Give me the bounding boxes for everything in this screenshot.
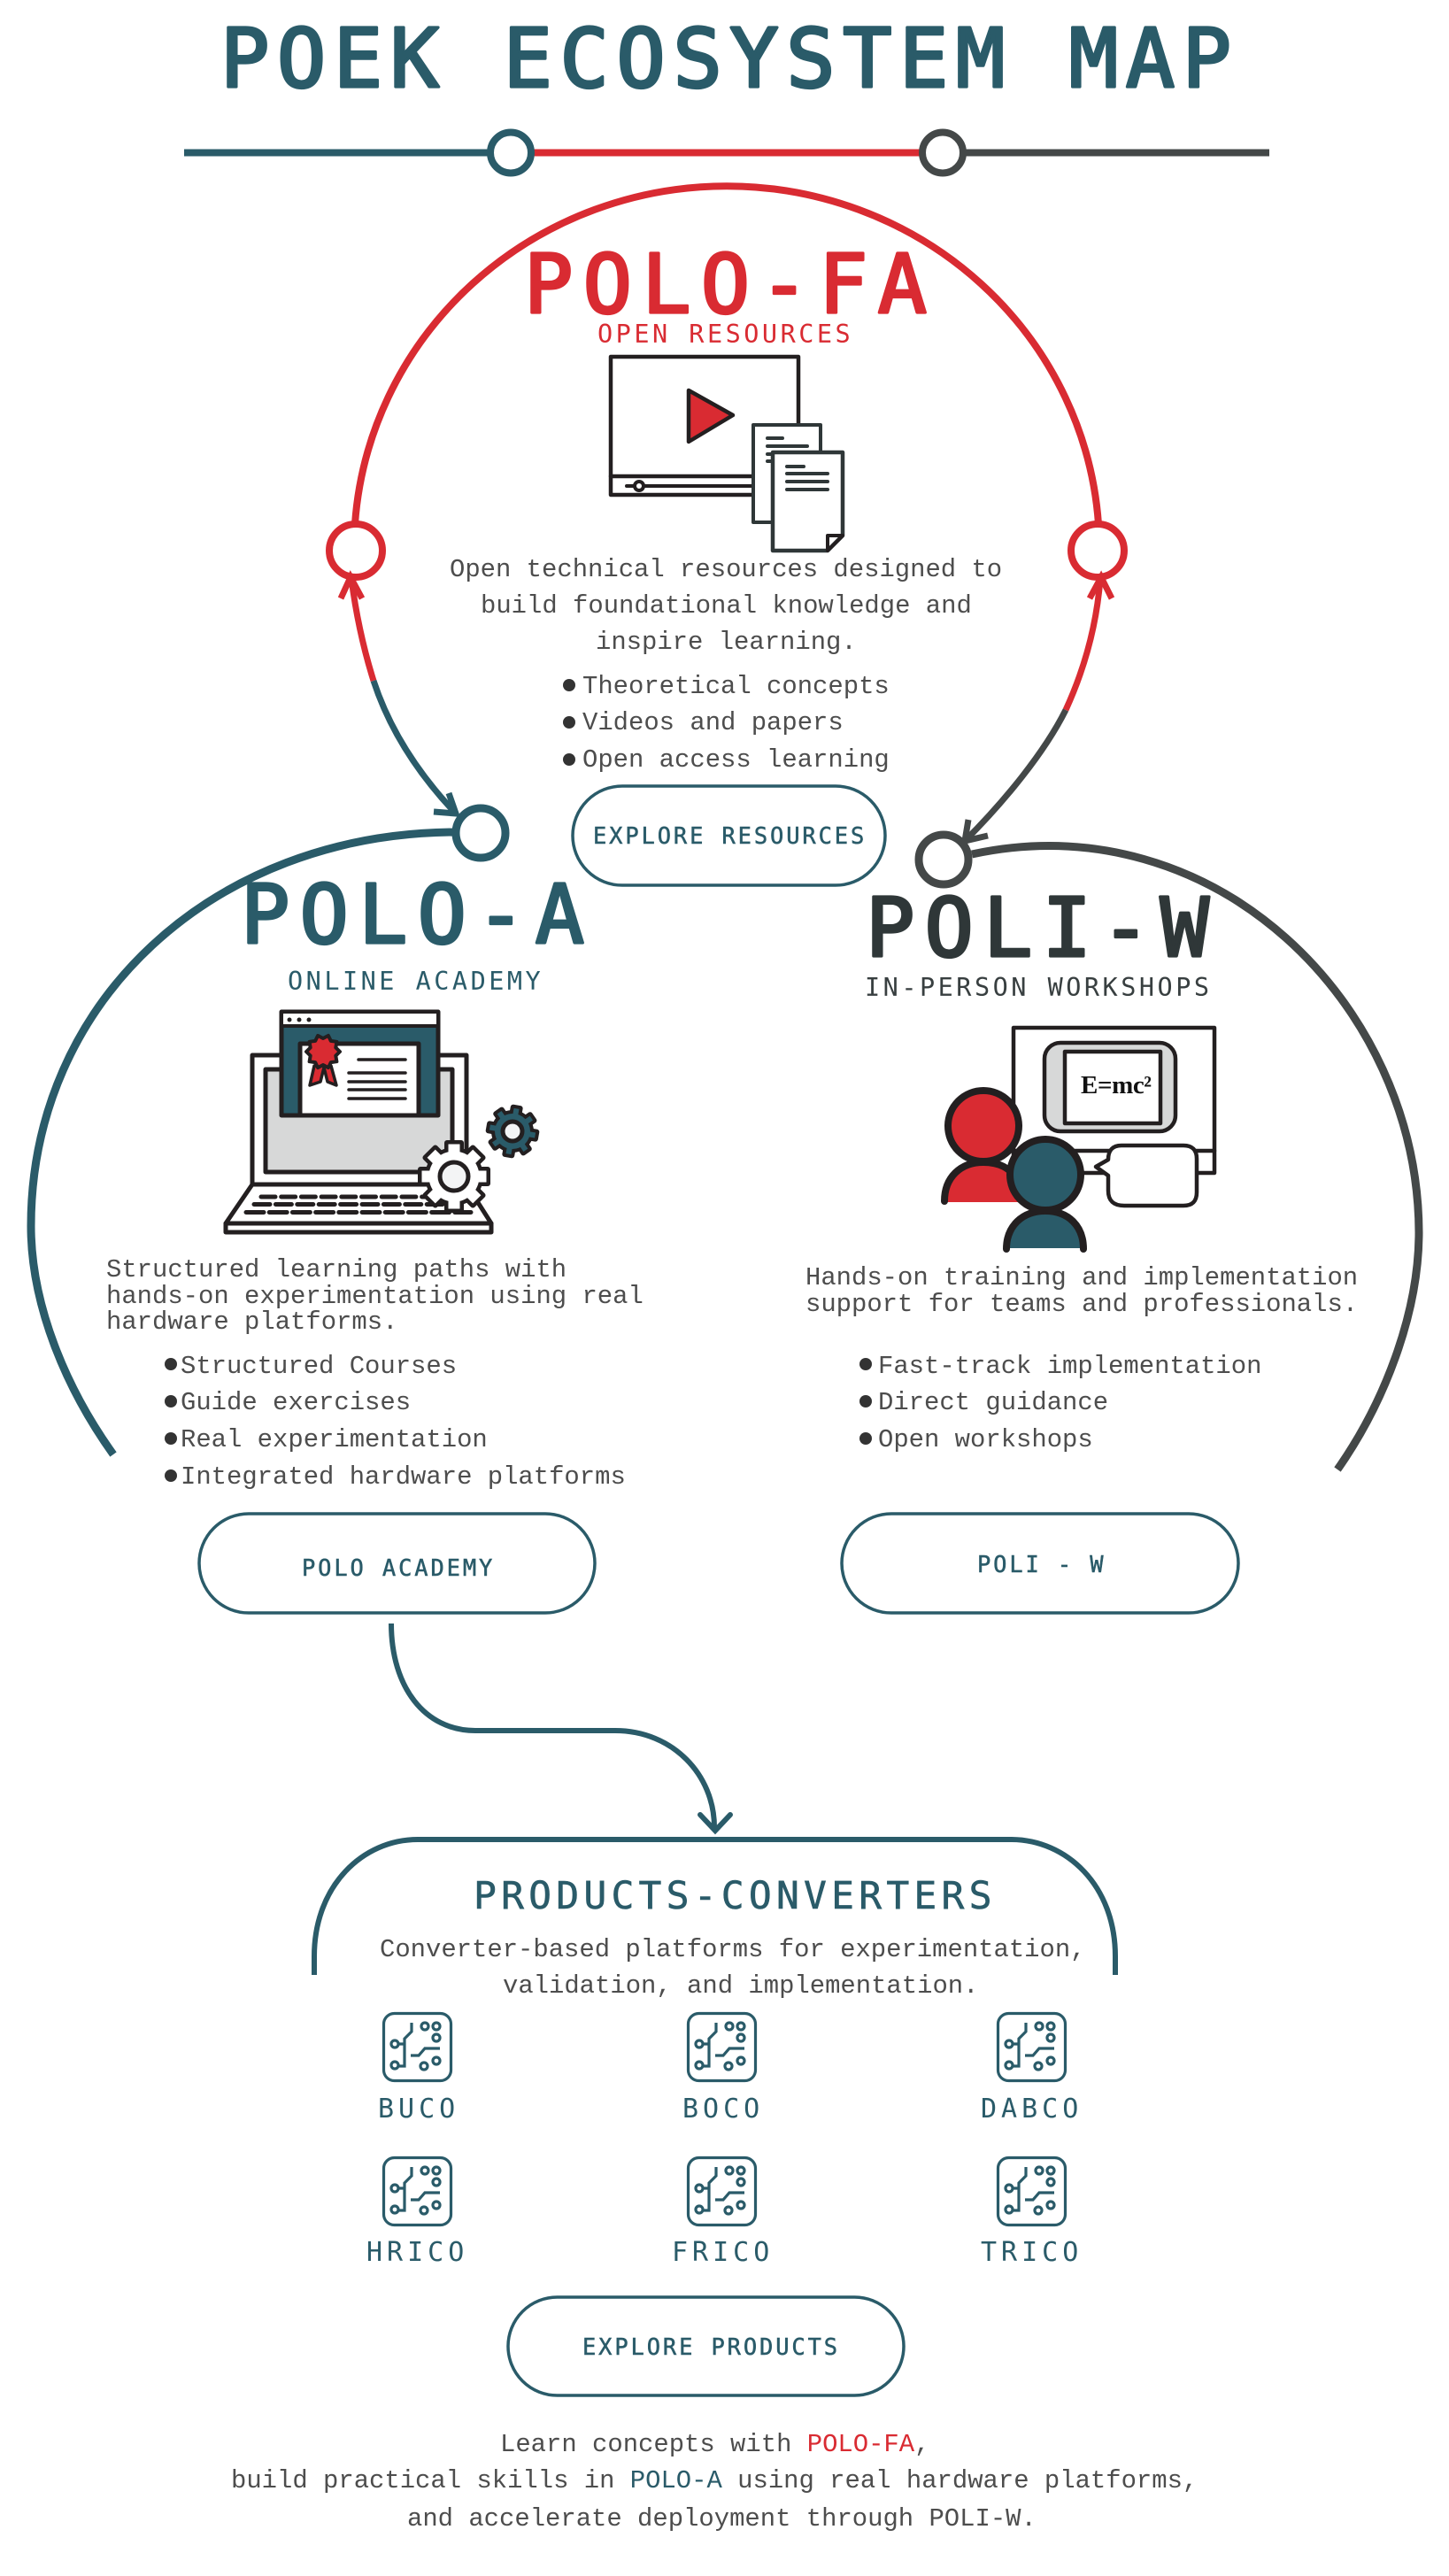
list: POLO-FA bullets: Theoretical concepts (582, 672, 890, 701)
list: POLI-W bullets (859, 1352, 1261, 1454)
text block: POLO-FA description (450, 555, 1002, 657)
text block: POLO-A description: Structured learning paths with (106, 1255, 566, 1284)
icon: white gear (418, 1140, 490, 1213)
button: explore products: EXPLORE PRODUCTS (582, 2333, 840, 2360)
list: POLI-W bullets: Fast-track implementation (878, 1352, 1261, 1381)
list: POLO-FA bullets: Videos and papers (582, 708, 844, 737)
heading: products-converters: PRODUCTS-CONVERTERS (474, 1874, 997, 1918)
text block: POLI-W description: Hands-on training and implementation (805, 1263, 1358, 1292)
list: POLO-FA bullets: Open access learning (582, 745, 890, 775)
list: POLO-A bullets: Real experimentation (181, 1425, 488, 1454)
list: POLI-W bullets: Open workshops (878, 1425, 1093, 1454)
icon: teal gear (485, 1104, 540, 1159)
button: explore resources: EXPLORE RESOURCES (593, 822, 867, 849)
timeline divider with two nodes (184, 133, 1269, 174)
text block: POLO-FA description: Open technical resources designed to (450, 555, 1002, 584)
panel: POLI-W arch (919, 835, 1419, 1469)
text block: POLO-FA description: build foundational knowledge and (481, 591, 972, 621)
arrow: academy to products (391, 1623, 730, 1831)
title: POEK ECOSYSTEM MAP (220, 12, 1231, 106)
text block: POLI-W description (805, 1263, 1358, 1319)
button: POLO academy: POLO ACADEMY (302, 1554, 495, 1581)
heading: POLO-A: POLO-A (241, 868, 584, 962)
list: POLI-W bullets: Direct guidance (878, 1388, 1108, 1417)
button: POLI-W (842, 1514, 1238, 1613)
text block: POLO-A description: hands-on experimentation using real (106, 1282, 644, 1311)
arrow: POLO-A to POLO-FA link (341, 577, 456, 814)
button: explore products (508, 2297, 904, 2395)
product: TRICO (981, 2158, 1083, 2268)
product: FRICO: FRICO (672, 2237, 774, 2268)
text block: POLI-W description: support for teams and professionals. (805, 1290, 1358, 1319)
subheading: in-person workshops: IN-PERSON WORKSHOPS (865, 973, 1213, 1002)
text block: products description: Converter-based platforms for experimentation, (380, 1935, 1086, 1964)
product: BOCO (682, 2013, 764, 2125)
product: TRICO: TRICO (981, 2237, 1083, 2268)
heading: POLO-FA: POLO-FA (524, 237, 927, 332)
panel: POLO-FA arch (329, 186, 1124, 577)
product: BUCO (378, 2013, 459, 2125)
list: POLO-A bullets: Integrated hardware platforms (181, 1462, 626, 1492)
button: POLO academy (199, 1514, 595, 1613)
text block: POLO-A description (106, 1255, 644, 1337)
closing text block (231, 2430, 1198, 2534)
text block: products description (380, 1935, 1086, 2001)
text block: products description: validation, and implementation. (503, 1971, 978, 2001)
closing text block: Learn concepts with POLO-FA, (500, 2430, 929, 2459)
icon: people at a board with speech bubble (944, 1028, 1214, 1249)
button: explore resources (573, 786, 885, 885)
subheading: open resources: OPEN RESOURCES (597, 320, 853, 349)
equation: E=mc² (1081, 1071, 1152, 1099)
arrow: POLI-W to POLO-FA link (965, 577, 1112, 841)
product: HRICO (366, 2158, 468, 2268)
product: DABCO (981, 2013, 1083, 2125)
list: POLO-A bullets: Guide exercises (181, 1388, 411, 1417)
product: BOCO: BOCO (682, 2094, 764, 2125)
product: BUCO: BUCO (378, 2094, 459, 2125)
panel: POLO-A arch (31, 808, 505, 1454)
product: FRICO (672, 2158, 774, 2268)
closing text block: build practical skills in POLO-A using real hardware platforms, (231, 2466, 1198, 2495)
subheading: online academy: ONLINE ACADEMY (288, 967, 543, 996)
panel: products arch (314, 1839, 1115, 1975)
list: POLO-A bullets (165, 1352, 626, 1492)
icon: laptop with certificate and gears (226, 1012, 540, 1232)
list: POLO-A bullets: Structured Courses (181, 1352, 457, 1381)
list: POLO-FA bullets (563, 672, 890, 775)
text block: POLO-A description: hardware platforms. (106, 1307, 397, 1337)
text block: POLO-FA description: inspire learning. (596, 628, 857, 657)
closing text block: and accelerate deployment through POLI-W. (407, 2504, 1037, 2534)
product: DABCO: DABCO (981, 2094, 1083, 2125)
product: HRICO: HRICO (366, 2237, 468, 2268)
button: POLI-W: POLI - W (977, 1551, 1106, 1577)
heading: POLI-W: POLI-W (866, 881, 1210, 976)
icon: video player and documents (611, 357, 843, 551)
